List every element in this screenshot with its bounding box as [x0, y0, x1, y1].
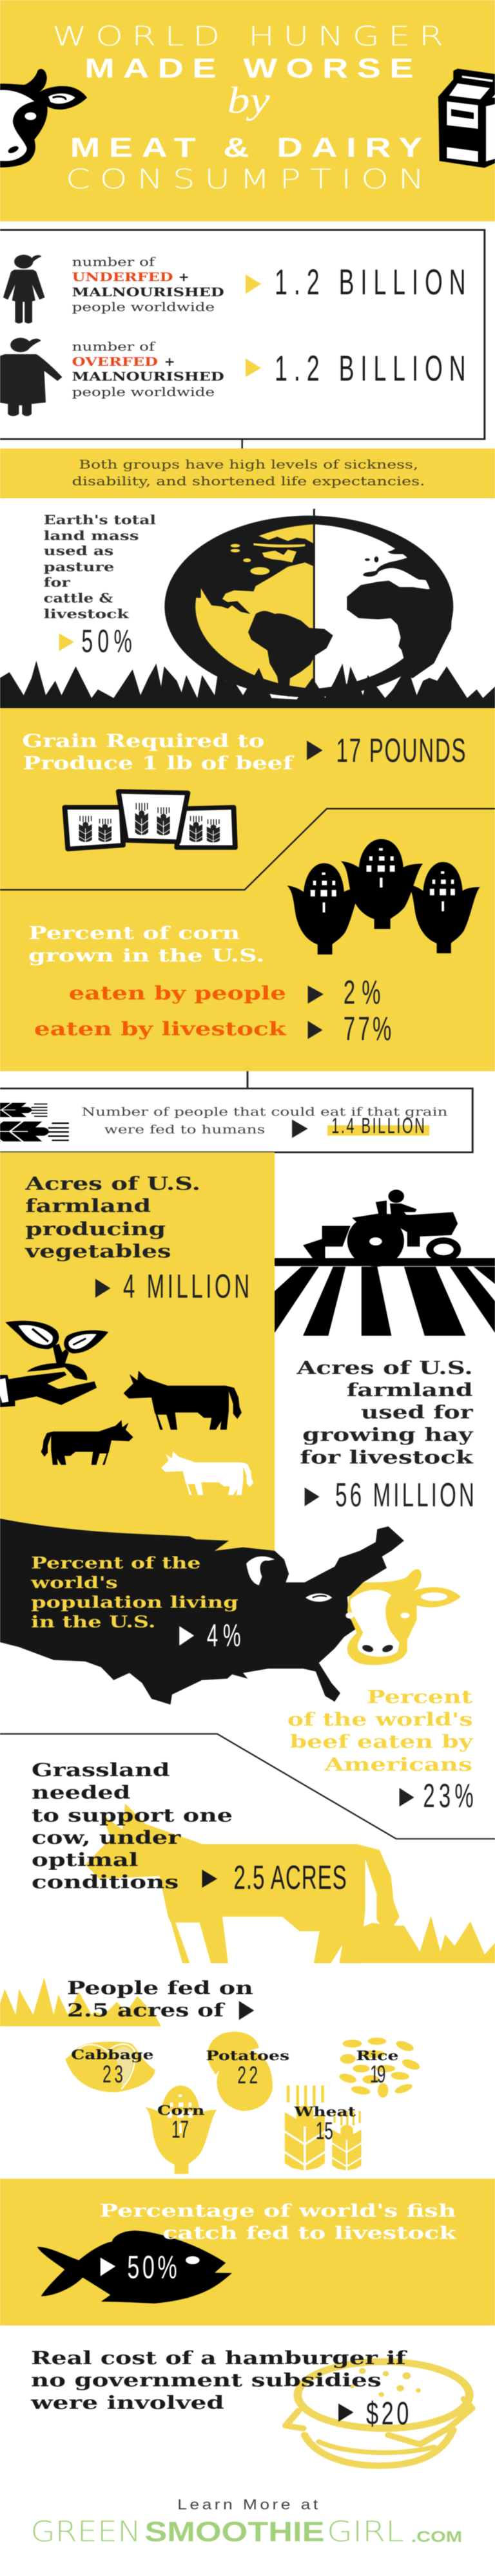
text: percent of world's population: in the U.S. — [31, 1613, 155, 1632]
title line: consumption: CONSUMPTION — [66, 164, 424, 195]
map: united states — [0, 1519, 404, 1705]
text: underfed description: + — [179, 270, 189, 284]
text: both groups — [72, 458, 425, 488]
heading: people fed: 2.5 acres of — [67, 2000, 226, 2020]
arrow — [292, 1119, 308, 1138]
text: earth's land mass: livestock — [44, 607, 130, 621]
yellow grass left — [0, 1978, 161, 2026]
footer: logo: GIRL — [327, 2515, 404, 2548]
title line: made worse: MADE WORSE — [84, 53, 413, 84]
text: grassland needed: conditions — [32, 1871, 179, 1893]
text: acres producing vegetables: producing — [25, 1218, 166, 1239]
icon: hand holding seedling — [0, 1321, 108, 1407]
heading: grain required: Grain Required to — [22, 730, 264, 751]
text: underfed description: number of — [72, 255, 156, 269]
icon: yellow cow head — [345, 1569, 461, 1665]
icon: black cow large — [124, 1370, 242, 1430]
icon: sideways wheat — [0, 1103, 69, 1141]
text: percent of world's beef — [287, 1687, 474, 1775]
text: both groups: disability, and shortened life expectancies. — [72, 474, 425, 488]
icon: corn cobs — [287, 839, 480, 954]
icon: cabbage — [65, 2041, 155, 2092]
text: overfed description: MALNOURISHED — [72, 370, 224, 384]
arrow — [95, 1279, 110, 1298]
text: overfed description: people worldwide — [72, 385, 215, 399]
text: acres producing vegetables — [24, 1173, 200, 1262]
icons: crops — [65, 2032, 421, 2174]
text: acres producing vegetables: farmland — [25, 1195, 151, 1217]
text: acres growing hay — [296, 1358, 474, 1468]
text: acres growing hay: used for — [361, 1402, 474, 1423]
text: acres growing hay: farmland — [347, 1379, 473, 1401]
footer: logo: .COM — [411, 2528, 462, 2545]
text: earth's land mass: for — [44, 575, 71, 590]
label: wheat 15: Wheat — [293, 2105, 356, 2120]
text: underfed description: MALNOURISHED — [72, 285, 224, 299]
heading: percentage of fish: catch fed to livestock — [162, 2223, 457, 2244]
text: grassland needed — [32, 1759, 233, 1893]
text: real cost of a hamburger: were involved — [30, 2392, 224, 2414]
stat: 50 percent fish: 50% — [127, 2249, 177, 2286]
arrow — [307, 741, 323, 760]
label: rice 19: 19 — [370, 2060, 385, 2088]
text: underfed description: people worldwide — [72, 300, 215, 314]
label: potatoes 22: 22 — [237, 2061, 258, 2088]
label: cabbage 23: Cabbage — [71, 2048, 154, 2063]
arrow — [239, 2001, 254, 2020]
heading: percentage of fish — [99, 2201, 457, 2244]
text: earth's land mass: Earth's total — [44, 513, 156, 527]
text: acres producing vegetables: Acres of U.S. — [24, 1173, 200, 1194]
label: rice 19: Rice — [356, 2049, 399, 2064]
stat: 20 dollars: $20 — [366, 2396, 409, 2432]
footer: logo: SMOOTHIE — [144, 2516, 325, 2548]
grass — [0, 661, 495, 708]
icon: potatoes — [208, 2032, 273, 2111]
icon: heavy woman — [0, 338, 62, 416]
icon: black cow small — [41, 1420, 133, 1465]
stat: 2 percent: 2% — [344, 974, 381, 1011]
text: acres growing hay: Acres of U.S. — [296, 1358, 473, 1378]
icon: wheat — [285, 2085, 362, 2170]
label: eaten by livestock: eaten by livestock — [34, 1019, 287, 1040]
stat: 1.2 billion overfed: 1.2 BILLION — [275, 348, 465, 388]
icon: tractor and field — [275, 1189, 495, 1336]
text: earth's land mass: pasture — [44, 560, 114, 574]
text: earth's land mass — [44, 513, 156, 621]
text: real cost of a hamburger — [30, 2348, 407, 2414]
icon: corn — [145, 2085, 217, 2174]
stat: 1.2 billion underfed: 1.2 BILLION — [275, 262, 465, 302]
arrow — [338, 2403, 354, 2421]
text: percent of world's population: Percent of the — [31, 1554, 201, 1573]
panel: fish catch — [0, 2179, 495, 2325]
icon: fish — [37, 2231, 232, 2304]
text: earth's land mass: used as — [44, 544, 113, 558]
arrow — [308, 1021, 323, 1039]
text: grassland needed: Grassland — [32, 1759, 170, 1781]
stat: 2.5 acres: 2.5 ACRES — [233, 1860, 347, 1897]
heading: percent of corn: grown in the U.S. — [28, 945, 264, 966]
arrow — [179, 1626, 194, 1645]
text: percent of world's population: population living — [31, 1593, 238, 1612]
panel: 1.4 billion callout — [0, 1088, 472, 1152]
text: overfed description: + — [164, 355, 175, 369]
panel: underfed and overfed — [0, 230, 485, 450]
icon: hamburger — [286, 2362, 472, 2466]
arrow — [308, 985, 324, 1003]
text: acres growing hay: for livestock — [300, 1447, 474, 1468]
stat: 77 percent: 77% — [344, 1011, 391, 1048]
label: wheat 15: 15 — [316, 2117, 333, 2145]
icon: thin woman — [3, 255, 45, 323]
text: percent of world's beef: beef eaten by — [290, 1732, 474, 1752]
label: wheat 15 — [293, 2105, 356, 2145]
footer: logo — [31, 2515, 462, 2548]
text: people that could eat: were fed to humans — [104, 1124, 265, 1137]
stat: 23 percent: 23% — [423, 1778, 474, 1815]
text: real cost of a hamburger: Real cost of a hamburger if — [31, 2348, 407, 2369]
section: US map and beef — [0, 1358, 495, 1839]
text: earth's land mass: cattle & — [44, 591, 113, 605]
icon: grain sacks — [64, 791, 235, 849]
text: percent of world's beef: Americans — [324, 1754, 472, 1775]
arrow — [246, 274, 261, 294]
text: underfed description — [72, 255, 224, 314]
text: grassland needed: cow, under — [32, 1827, 181, 1848]
icon: white cow — [161, 1451, 253, 1495]
label: corn 17: Corn — [157, 2103, 205, 2119]
label: rice 19 — [356, 2049, 399, 2088]
title line: world hunger: WORLD HUNGER — [52, 21, 443, 52]
section: fish, burger, footer — [0, 2179, 495, 2548]
text: acres growing hay: growing hay — [302, 1425, 474, 1445]
label: potatoes 22: Potatoes — [206, 2049, 289, 2064]
text: overfed description: number of — [72, 339, 156, 354]
text: real cost of a hamburger: no government subsidies — [31, 2370, 382, 2391]
label: eaten by people: eaten by people — [69, 983, 286, 1004]
footer: logo: GREEN — [31, 2515, 141, 2548]
stat: 1.4 billion: 1.4 BILLION — [331, 1114, 425, 1139]
section: header — [0, 0, 495, 222]
text: people that could eat: Number of people that could eat if that grain — [81, 1106, 448, 1119]
text: percent of world's population — [30, 1554, 238, 1632]
arrow — [59, 633, 74, 651]
arrow — [202, 1870, 217, 1888]
text: percent of world's beef: Percent — [367, 1687, 473, 1707]
icon: globe — [164, 509, 453, 697]
icon: milk carton — [438, 69, 495, 168]
heading: grain required: Produce 1 lb of beef — [23, 753, 295, 773]
stat: 56 million: 56 MILLION — [335, 1477, 474, 1514]
stat: 17 pounds: 17 POUNDS — [336, 733, 465, 770]
section: grassland — [0, 1759, 495, 2026]
label: corn 17: 17 — [171, 2116, 189, 2143]
arrow — [305, 1488, 320, 1506]
text: grassland needed: optimal — [32, 1850, 139, 1870]
text: percent of world's population: world's — [30, 1573, 118, 1593]
label: cabbage 23: 23 — [102, 2060, 123, 2088]
text: percent of world's beef: of the world's — [287, 1709, 473, 1730]
icon: yellow cow silhouette — [85, 1803, 400, 1963]
heading: percent of corn — [28, 923, 264, 966]
stat: 4 million: 4 MILLION — [123, 1269, 249, 1305]
yellow grass right — [340, 1916, 495, 1963]
label: cabbage 23 — [71, 2048, 154, 2088]
text: grassland needed: to support one — [32, 1805, 233, 1826]
label: corn 17 — [157, 2103, 205, 2143]
text: underfed description: UNDERFED — [72, 270, 173, 284]
text: people that could eat — [81, 1106, 448, 1137]
text: overfed description: OVERFED — [72, 355, 158, 369]
text: earth's land mass: land mass — [44, 528, 139, 543]
heading: people fed: People fed on — [67, 1978, 253, 1998]
icon: rice — [338, 2038, 421, 2098]
text: both groups: Both groups have high levels of sickness, — [79, 458, 418, 471]
section: globe and grain background — [0, 448, 495, 1071]
stat: 50 percent: 50% — [81, 623, 132, 659]
text: grassland needed: needed — [32, 1782, 130, 1803]
icon: cow head — [0, 69, 87, 167]
heading: grain required — [22, 730, 295, 773]
heading: people fed — [67, 1978, 253, 2020]
panel: vegetables yellow — [0, 1152, 275, 1552]
title word: by: by — [228, 80, 271, 121]
title line: meat and dairy: MEAT & DAIRY — [70, 132, 422, 163]
arrow — [101, 2257, 115, 2276]
heading: percentage of fish: Percentage of world's fish — [99, 2201, 456, 2221]
section: corn percentages — [0, 923, 495, 1552]
text: acres producing vegetables: vegetables — [24, 1241, 171, 1262]
footer: learn more: Learn More at — [177, 2497, 318, 2513]
heading: percent of corn: Percent of corn — [28, 923, 240, 943]
arrow — [400, 1788, 414, 1806]
text: overfed description — [72, 339, 224, 399]
arrow — [246, 359, 261, 377]
label: potatoes 22 — [206, 2049, 289, 2088]
stat: 4 percent: 4% — [207, 1618, 241, 1653]
